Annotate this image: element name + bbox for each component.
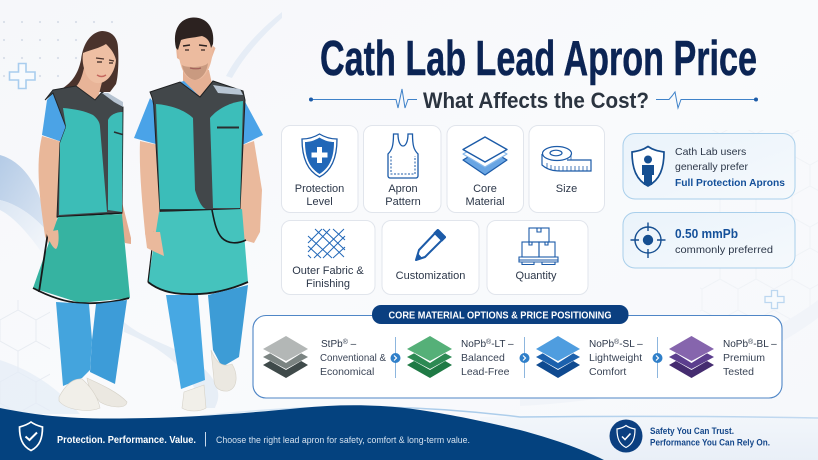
skirt [148,209,248,294]
face [83,44,116,83]
icon: woven mesh [308,229,345,258]
option: StPb: StPb [321,339,343,350]
sleeves [134,98,166,146]
option: NoPb-LT: ® [486,338,492,346]
tagline: Choose the right lead apron for safety, comfort & long-term value. [216,435,470,445]
option: NoPb-SL: Comfort [589,366,626,378]
label: Level [306,196,333,208]
option: NoPb-LT: Lead-Free [461,366,510,378]
decorative cross right [765,290,784,308]
panel: core material options [253,305,782,398]
label: Customization [396,270,465,282]
icon: apron vest [388,134,418,178]
icon: shield check [20,422,42,450]
option: NoPb-LT: -LT – [491,339,514,350]
option: NoPb-LT: Balanced [461,352,505,364]
icon: pencil [416,230,446,260]
callout: full protection aprons: Full Protection Aprons [675,177,785,189]
option: StPb: Economical [320,366,374,378]
option: NoPb-BL: Premium [723,352,765,364]
option: NoPb-LT [407,336,514,378]
ecg divider left [309,89,417,108]
hair [63,31,118,92]
vest [150,81,245,212]
callout: full protection aprons: generally prefer [675,161,748,173]
option: NoPb-BL: Tested [723,366,754,378]
label: Quantity [516,270,557,282]
label: Finishing [306,278,350,290]
option: StPb: – [348,339,357,350]
slogan: Protection. Performance. Value. [57,434,196,446]
option: StPb: ® [343,338,349,346]
arrow 1 [390,337,400,378]
option: NoPb-BL: -BL – [753,339,777,350]
option: NoPb-LT: NoPb [461,339,486,350]
hair [175,17,213,50]
arms [39,136,62,249]
subtitle: What Affects the Cost? [423,88,649,113]
trust badge: Performance You Can Rely On. [650,438,770,448]
icon: measuring tape [542,146,591,171]
collar [180,81,199,97]
card: core material [447,126,524,212]
sleeve [42,93,66,142]
arms [140,141,164,256]
icon: round shield [610,420,642,452]
card: protection level [282,126,358,212]
face [178,36,213,80]
pants [56,302,92,386]
trust badge [610,420,770,452]
option: NoPb-BL: ® [748,338,754,346]
shoes [87,378,127,407]
vest [45,86,123,217]
text: Cath Lab users [675,146,746,158]
decorative cross left [10,64,35,88]
option: NoPb-SL: Lightweight [589,352,642,364]
icon: stacked sheets [463,137,507,175]
skirt [33,214,130,303]
arrow 2 [520,337,530,378]
heading pill [372,305,628,324]
icon: shield with cross [302,134,337,177]
callout: 0.50 mmPb: commonly preferred [675,244,773,256]
arrow 3 [652,337,662,378]
card: apron pattern [364,126,441,212]
ears and neck [176,46,216,60]
label: Pattern [385,196,421,208]
icon: shield with person [632,146,664,186]
icon: target [630,222,666,258]
text: Safety You Can Trust. [650,426,734,436]
label: Size [556,183,577,195]
heading pill: CORE MATERIAL OPTIONS & PRICE POSITIONING [388,310,612,322]
option: NoPb-SL: -SL – [619,339,643,350]
callout: 0.50 mmPb [623,212,795,268]
card: size [529,126,604,212]
icon: boxes on pallet [519,228,558,264]
option: NoPb-BL [669,336,777,378]
label: Material [465,196,505,208]
footer band [0,405,818,460]
figure: man wearing lead apron [134,17,263,411]
option: StPb: Conventional & [320,352,386,364]
neck [74,68,102,102]
option: StPb [263,336,386,378]
card: outer fabric and finishing [282,220,375,294]
card: quantity [487,220,588,294]
option: NoPb-SL: NoPb [589,339,614,350]
option: NoPb-SL [536,336,643,378]
label: Protection [295,183,344,195]
card: customization [382,220,479,294]
figure: woman wearing lead apron [33,31,131,410]
pants [166,295,205,389]
label: Outer Fabric & [292,265,364,277]
option: NoPb-SL: ® [614,338,620,346]
label: Apron [388,183,418,195]
callout: full protection aprons [623,134,795,199]
ecg divider right [656,92,758,108]
shoes [182,385,206,411]
option: NoPb-BL: NoPb [723,339,748,350]
label: Core [473,183,497,195]
text: 0.50 mmPb [675,227,738,241]
